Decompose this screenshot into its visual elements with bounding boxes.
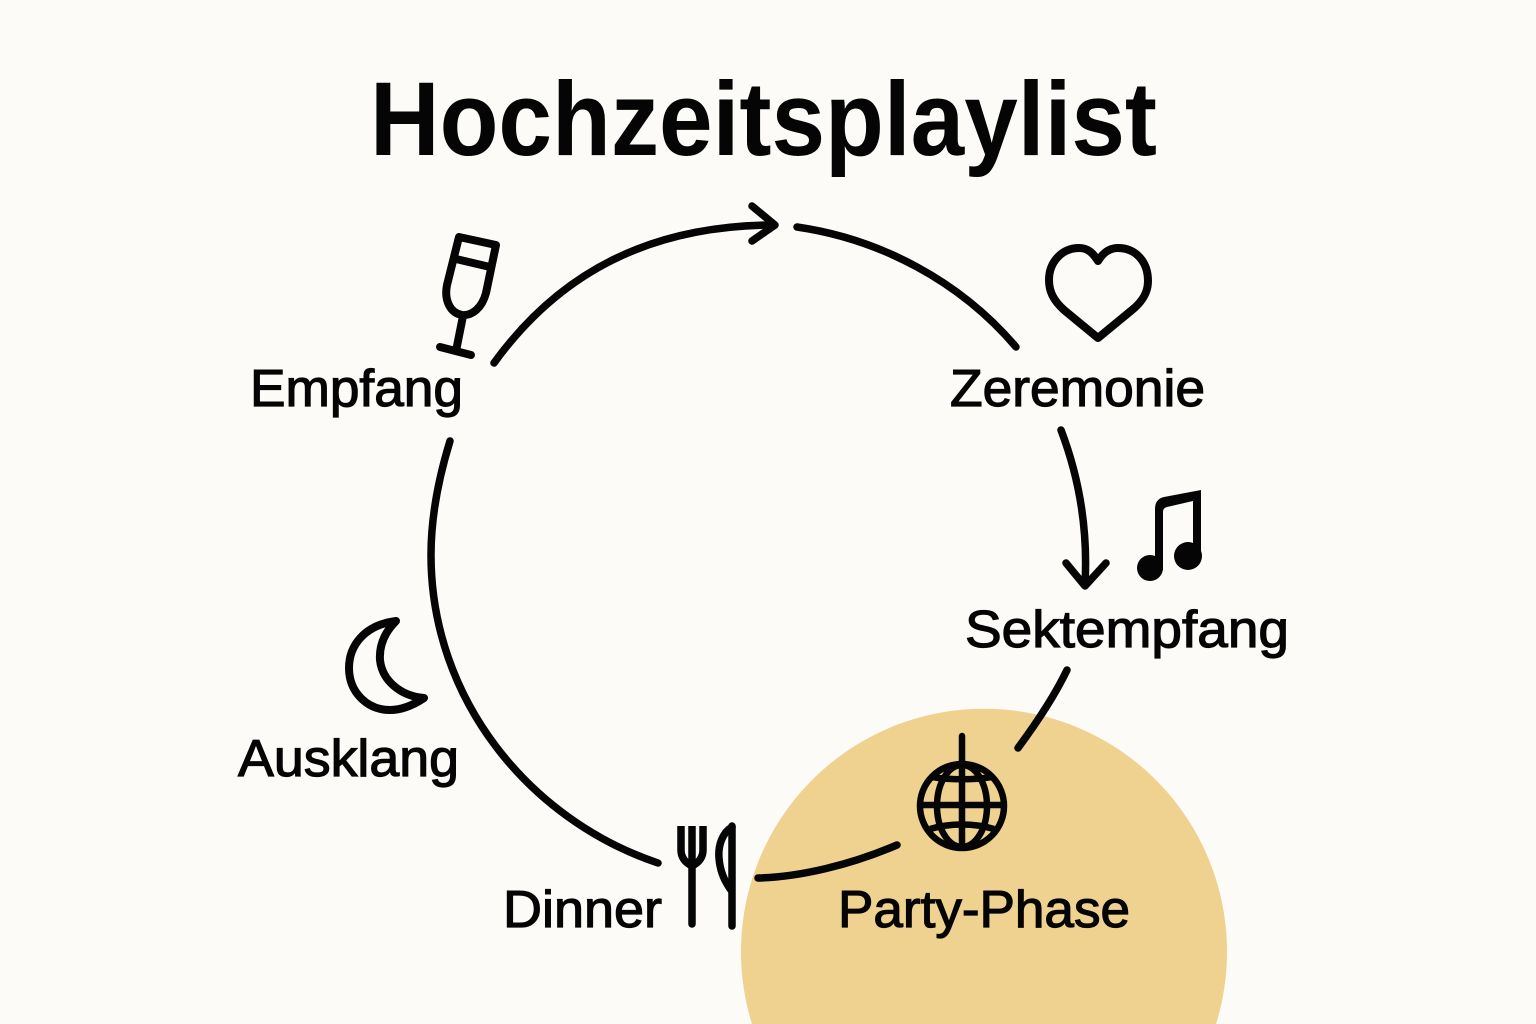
icon: disco ball [920,736,1004,848]
label: Party-Phase: Party-Phase [838,881,1130,939]
fork [681,826,703,924]
icon: fork and knife [681,826,732,926]
arrow: Party-Phase to Dinner [758,845,897,878]
arrow: Zeremonie to Sektempfang [1061,430,1106,586]
label: Empfang: Empfang [250,360,463,418]
knife [719,826,732,926]
label: Ausklang: Ausklang [238,730,459,788]
arrow: top to Zeremonie [797,227,1016,347]
icon: champagne glass [440,237,496,355]
highlight circle: party phase [741,709,1227,1024]
label: Zeremonie: Zeremonie [950,360,1205,418]
icon: heart [1049,248,1148,338]
arrow: Sektempfang to Party-Phase [1018,670,1067,748]
label: Sektempfang: Sektempfang [965,601,1289,659]
title: Hochzeitsplaylist [370,61,1157,178]
arrow: Empfang to top [494,206,775,363]
label: Dinner: Dinner [503,881,662,939]
icon: music note [1137,490,1202,581]
arrow: Dinner to Empfang [431,441,658,863]
icon: crescent moon [349,621,424,710]
